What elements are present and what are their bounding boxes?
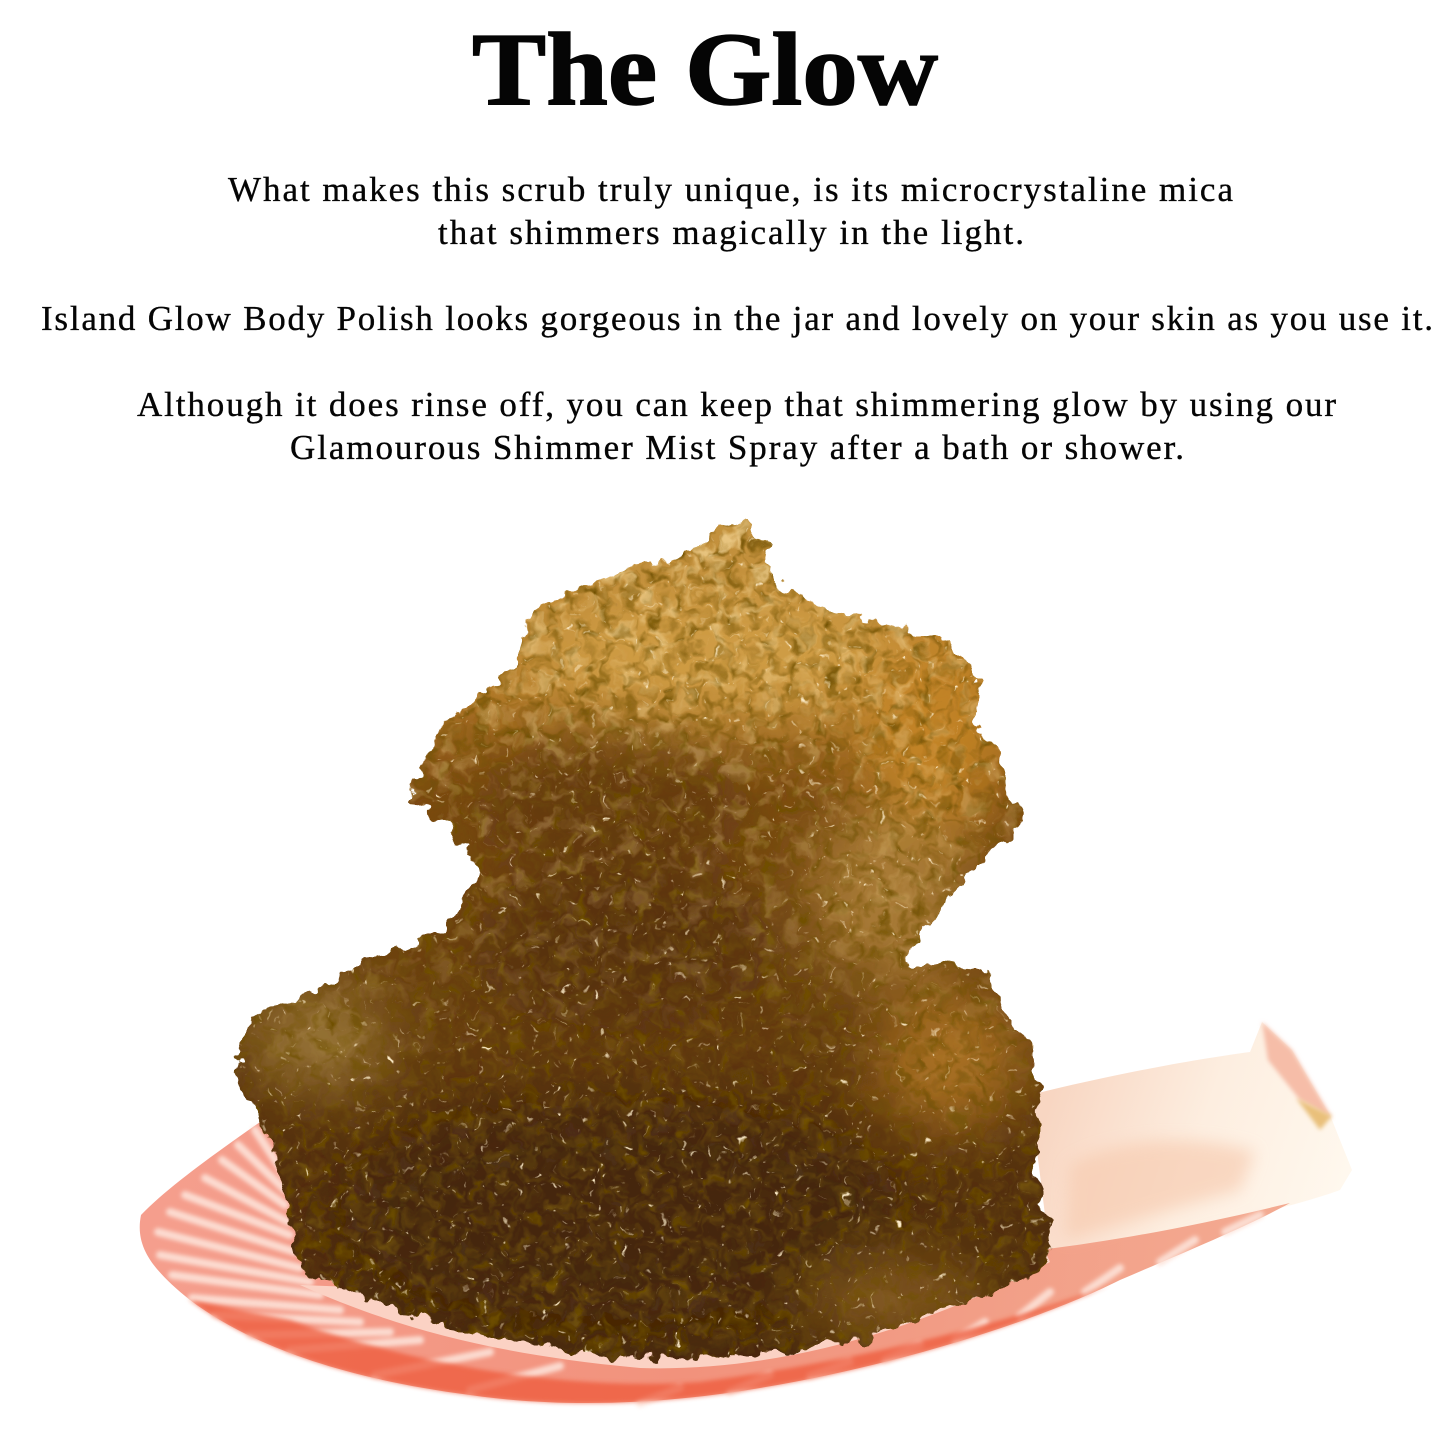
title: The Glow: [472, 12, 938, 127]
text block: intro paragraphs: [41, 170, 1433, 467]
text block: intro paragraphs: What makes this scrub truly unique, is its microcrystaline mica: [228, 170, 1233, 209]
text block: intro paragraphs: that shimmers magically in the light.: [438, 213, 1024, 252]
text block: intro paragraphs: Although it does rinse off, you can keep that shimmering glow by using our: [137, 385, 1336, 424]
text block: intro paragraphs: Glamourous Shimmer Mist Spray after a bath or shower.: [290, 428, 1184, 467]
text block: intro paragraphs: Island Glow Body Polish looks gorgeous in the jar and lovely on your skin as you use it.: [41, 299, 1433, 338]
seashell: [140, 1022, 1352, 1403]
scrub mound: [220, 510, 1060, 1370]
illustration: scrub on a seashell: [140, 510, 1352, 1403]
